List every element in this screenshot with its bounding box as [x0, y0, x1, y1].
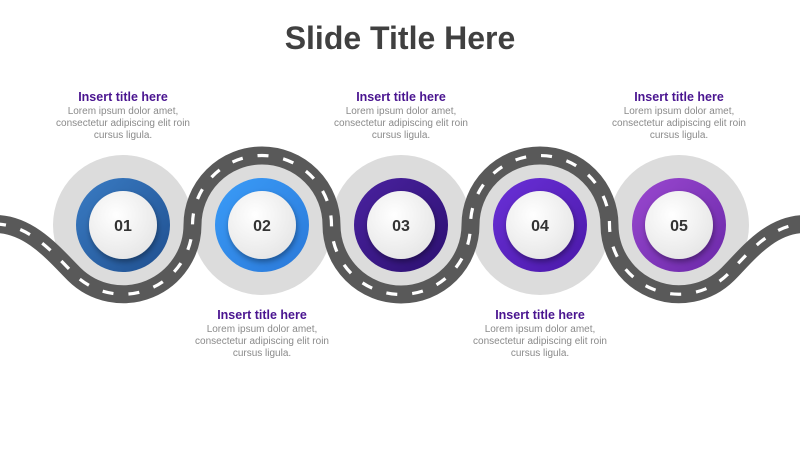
text block 5: cursus ligula. [650, 130, 708, 141]
text block 4: Lorem ipsum dolor amet, [485, 324, 595, 335]
text block 5: Insert title here [634, 90, 724, 104]
step 05 marker [632, 178, 726, 272]
text block 1: cursus ligula. [94, 130, 152, 141]
text block 4: consectetur adipiscing elit roin [473, 336, 607, 347]
step 01 marker: 01 [114, 218, 132, 235]
text block 2: cursus ligula. [233, 348, 291, 359]
text block 3: Insert title here [356, 90, 446, 104]
road [0, 156, 800, 294]
text block 1: Insert title here [78, 90, 168, 104]
text block 4: Insert title here [495, 308, 585, 322]
step 02 marker: 02 [253, 218, 271, 235]
gray backdrop discs [53, 155, 749, 295]
text block 5: consectetur adipiscing elit roin [612, 118, 746, 129]
text block 1 [56, 90, 190, 141]
text block 2: Lorem ipsum dolor amet, [207, 324, 317, 335]
step 04 marker: 04 [531, 218, 549, 235]
step 01 marker [76, 178, 170, 272]
text block 2: consectetur adipiscing elit roin [195, 336, 329, 347]
step 03 marker: 03 [392, 218, 410, 235]
text block 2: Insert title here [217, 308, 307, 322]
text block 3 [334, 90, 468, 141]
text block 4: cursus ligula. [511, 348, 569, 359]
text block 3: cursus ligula. [372, 130, 430, 141]
step 03 marker [354, 178, 448, 272]
text block 5: Lorem ipsum dolor amet, [624, 106, 734, 117]
step 02 marker [215, 178, 309, 272]
step 04 marker [493, 178, 587, 272]
text block 1: consectetur adipiscing elit roin [56, 118, 190, 129]
text block 2 [195, 308, 329, 359]
text block 4 [473, 308, 607, 359]
text block 3: Lorem ipsum dolor amet, [346, 106, 456, 117]
text block 1: Lorem ipsum dolor amet, [68, 106, 178, 117]
text block 5 [612, 90, 746, 141]
title: Slide Title Here [285, 20, 515, 56]
step 05 marker: 05 [670, 218, 688, 235]
text block 3: consectetur adipiscing elit roin [334, 118, 468, 129]
